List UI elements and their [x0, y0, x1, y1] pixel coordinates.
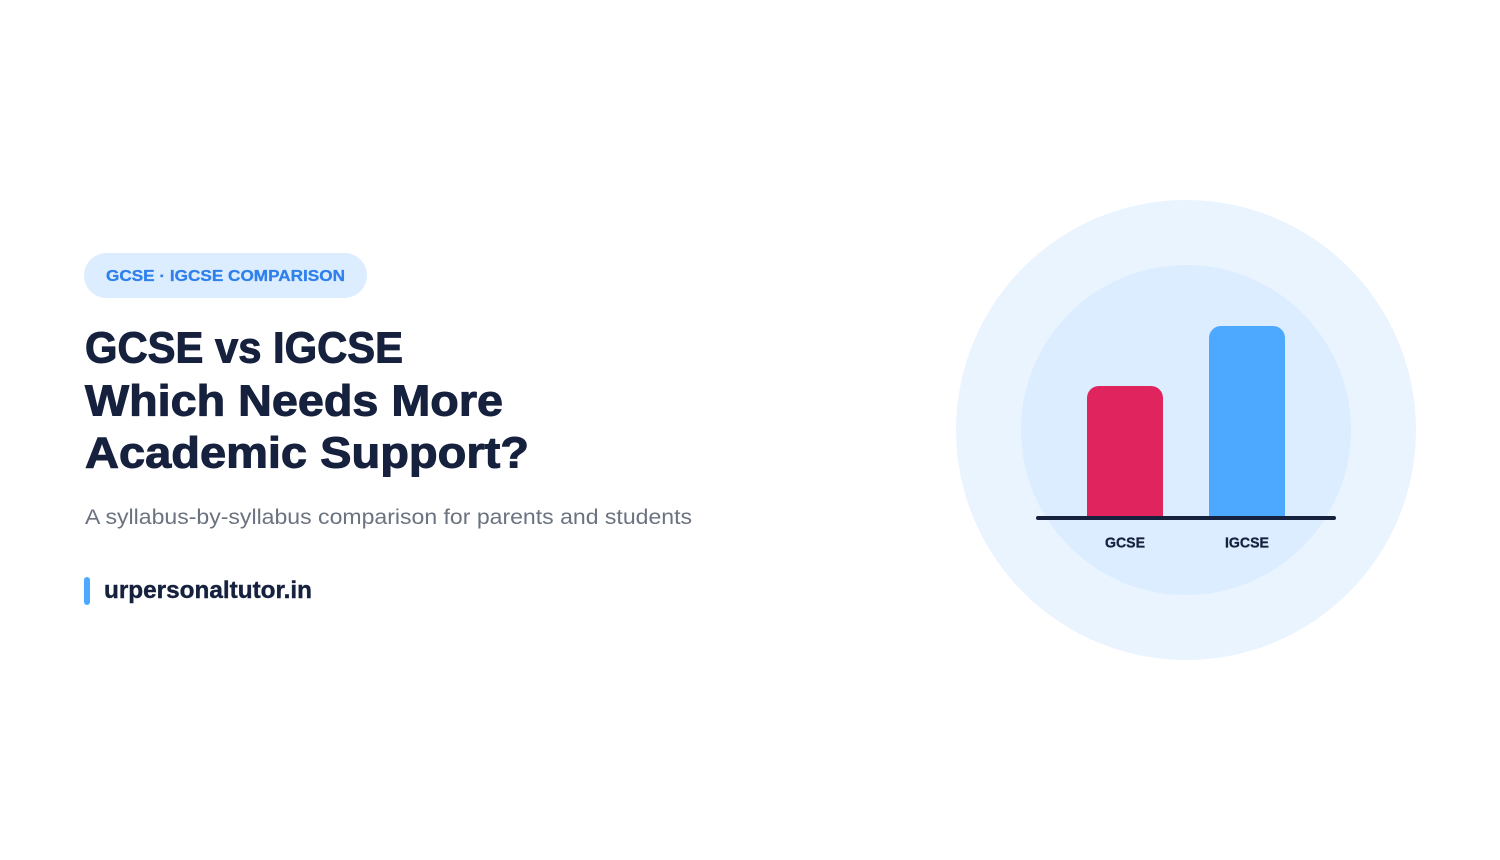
website text: urpersonaltutor.in	[104, 577, 312, 604]
title: Which Needs More	[85, 376, 503, 426]
panel: left text column	[84, 253, 692, 605]
website link	[84, 577, 312, 605]
bar: IGCSE	[1209, 326, 1285, 518]
outer circle	[956, 200, 1416, 660]
label: IGCSE: IGCSE	[1225, 534, 1269, 552]
label: GCSE: GCSE	[1105, 534, 1145, 552]
title: GCSE vs IGCSE	[85, 324, 403, 372]
panel: bar chart illustration	[956, 200, 1416, 660]
subtitle: A syllabus-by-syllabus comparison for parents and students	[85, 506, 692, 529]
inner circle	[1021, 265, 1351, 595]
accent bar	[84, 577, 90, 605]
badge: GCSE IGCSE comparison: GCSE · IGCSE COMPARISON	[106, 268, 345, 285]
title: Academic Support?	[85, 428, 529, 478]
badge: GCSE IGCSE comparison	[84, 253, 367, 298]
title	[85, 324, 529, 478]
bar: GCSE	[1087, 386, 1163, 518]
chart axis	[1036, 516, 1336, 520]
